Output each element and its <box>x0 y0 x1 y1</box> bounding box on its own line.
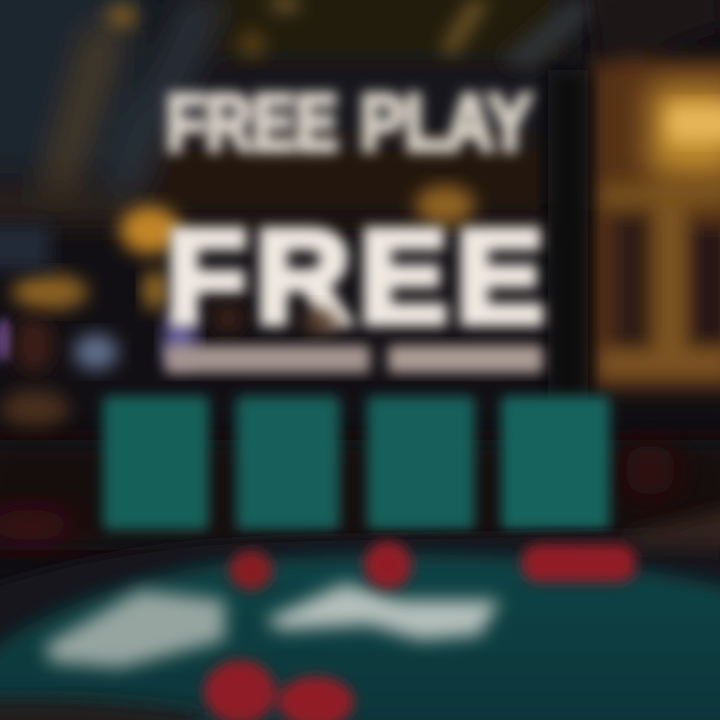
title: FREE PLAY: FREE <box>166 78 338 167</box>
title: FREE PLAY <box>166 78 532 167</box>
subtitle band <box>165 345 543 373</box>
card 4 <box>501 396 610 530</box>
card 3 <box>367 396 475 530</box>
teal cards <box>103 396 610 530</box>
title: FREE PLAY: PLAY <box>360 78 532 167</box>
red chips <box>204 541 636 720</box>
playing cards <box>45 583 500 668</box>
left side lights <box>0 185 475 430</box>
poker table <box>0 505 720 720</box>
headline: FREE: FREE <box>166 203 544 350</box>
ceiling background <box>0 0 590 220</box>
lower dark background <box>0 440 720 550</box>
glowing yellow window <box>650 85 720 175</box>
right wall <box>590 0 720 390</box>
card 1 <box>103 396 209 530</box>
dark pillar <box>548 70 588 400</box>
ceiling lights <box>106 0 610 70</box>
dark shadows beneath headline <box>212 304 338 334</box>
card 2 <box>236 396 340 530</box>
